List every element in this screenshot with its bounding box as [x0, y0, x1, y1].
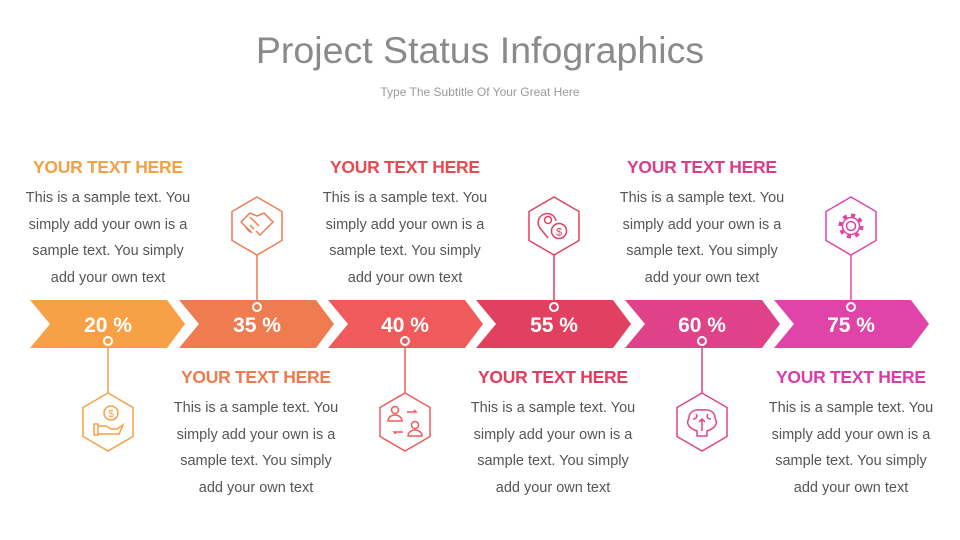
text block 2 (bottom): sample text. You simply [180, 453, 333, 469]
text block 5 (top): This is a sample text. You [620, 190, 784, 206]
text block 6 (bottom): simply add your own is a [772, 427, 931, 443]
icon: location dollar (top, 55%) [529, 197, 579, 311]
text block 1 (top): This is a sample text. You [26, 190, 190, 206]
icon: gear (top, 75%) [826, 197, 876, 311]
text block 1 (top): sample text. You simply [32, 243, 185, 259]
text block 2 (bottom): add your own text [199, 480, 313, 496]
text block 3 (top) [323, 157, 487, 286]
arrow: 55% [476, 300, 631, 348]
subtitle: Type The Subtitle Of Your Great Here [380, 85, 580, 99]
icon: brain bulb (bottom, 60%) [677, 337, 727, 451]
arrow: 75%: 75 % [827, 314, 875, 337]
text block 3 (top): This is a sample text. You [323, 190, 487, 206]
text block 5 (top): simply add your own is a [623, 217, 782, 233]
arrow: 40% [328, 300, 483, 348]
arrow: 20%: 20 % [84, 314, 132, 337]
icon: money hand (bottom, 20%) [83, 337, 133, 451]
arrow: 35%: 35 % [233, 314, 281, 337]
text block 5 (top): YOUR TEXT HERE [627, 157, 777, 177]
icon: location dollar (top, 55%): $ [556, 226, 562, 238]
text block 4 (bottom): add your own text [496, 480, 610, 496]
text block 5 (top): sample text. You simply [626, 243, 779, 259]
arrow: 55%: 55 % [530, 314, 578, 337]
text block 4 (bottom): This is a sample text. You [471, 400, 635, 416]
icon: handshake (top, 35%) [232, 197, 282, 311]
text block 1 (top): simply add your own is a [29, 217, 188, 233]
text block 3 (top): sample text. You simply [329, 243, 482, 259]
text block 2 (bottom) [174, 367, 338, 496]
text block 1 (top) [26, 157, 190, 286]
text block 1 (top): YOUR TEXT HERE [33, 157, 183, 177]
text block 6 (bottom): sample text. You simply [775, 453, 928, 469]
arrow: 60%: 60 % [678, 314, 726, 337]
text block 2 (bottom): simply add your own is a [177, 427, 336, 443]
arrow: 75% [774, 300, 929, 348]
text block 3 (top): add your own text [348, 270, 462, 286]
text block 4 (bottom): YOUR TEXT HERE [478, 367, 628, 387]
text block 3 (top): YOUR TEXT HERE [330, 157, 480, 177]
text block 6 (bottom): This is a sample text. You [769, 400, 933, 416]
text block 5 (top) [620, 157, 784, 286]
arrow: 40%: 40 % [381, 314, 429, 337]
arrow: 60% [625, 300, 780, 348]
arrow: 35% [179, 300, 334, 348]
text block 2 (bottom): YOUR TEXT HERE [181, 367, 331, 387]
title: Project Status Infographics [256, 29, 704, 71]
icon: people exchange (bottom, 40%) [380, 337, 430, 451]
text block 4 (bottom): sample text. You simply [477, 453, 630, 469]
text block 6 (bottom) [769, 367, 933, 496]
text block 1 (top): add your own text [51, 270, 165, 286]
text block 4 (bottom): simply add your own is a [474, 427, 633, 443]
text block 2 (bottom): This is a sample text. You [174, 400, 338, 416]
arrow: 20% [30, 300, 185, 348]
text block 4 (bottom) [471, 367, 635, 496]
text block 5 (top): add your own text [645, 270, 759, 286]
icon: money hand (bottom, 20%): $ [108, 409, 114, 420]
text block 3 (top): simply add your own is a [326, 217, 485, 233]
text block 6 (bottom): YOUR TEXT HERE [776, 367, 926, 387]
text block 6 (bottom): add your own text [794, 480, 908, 496]
